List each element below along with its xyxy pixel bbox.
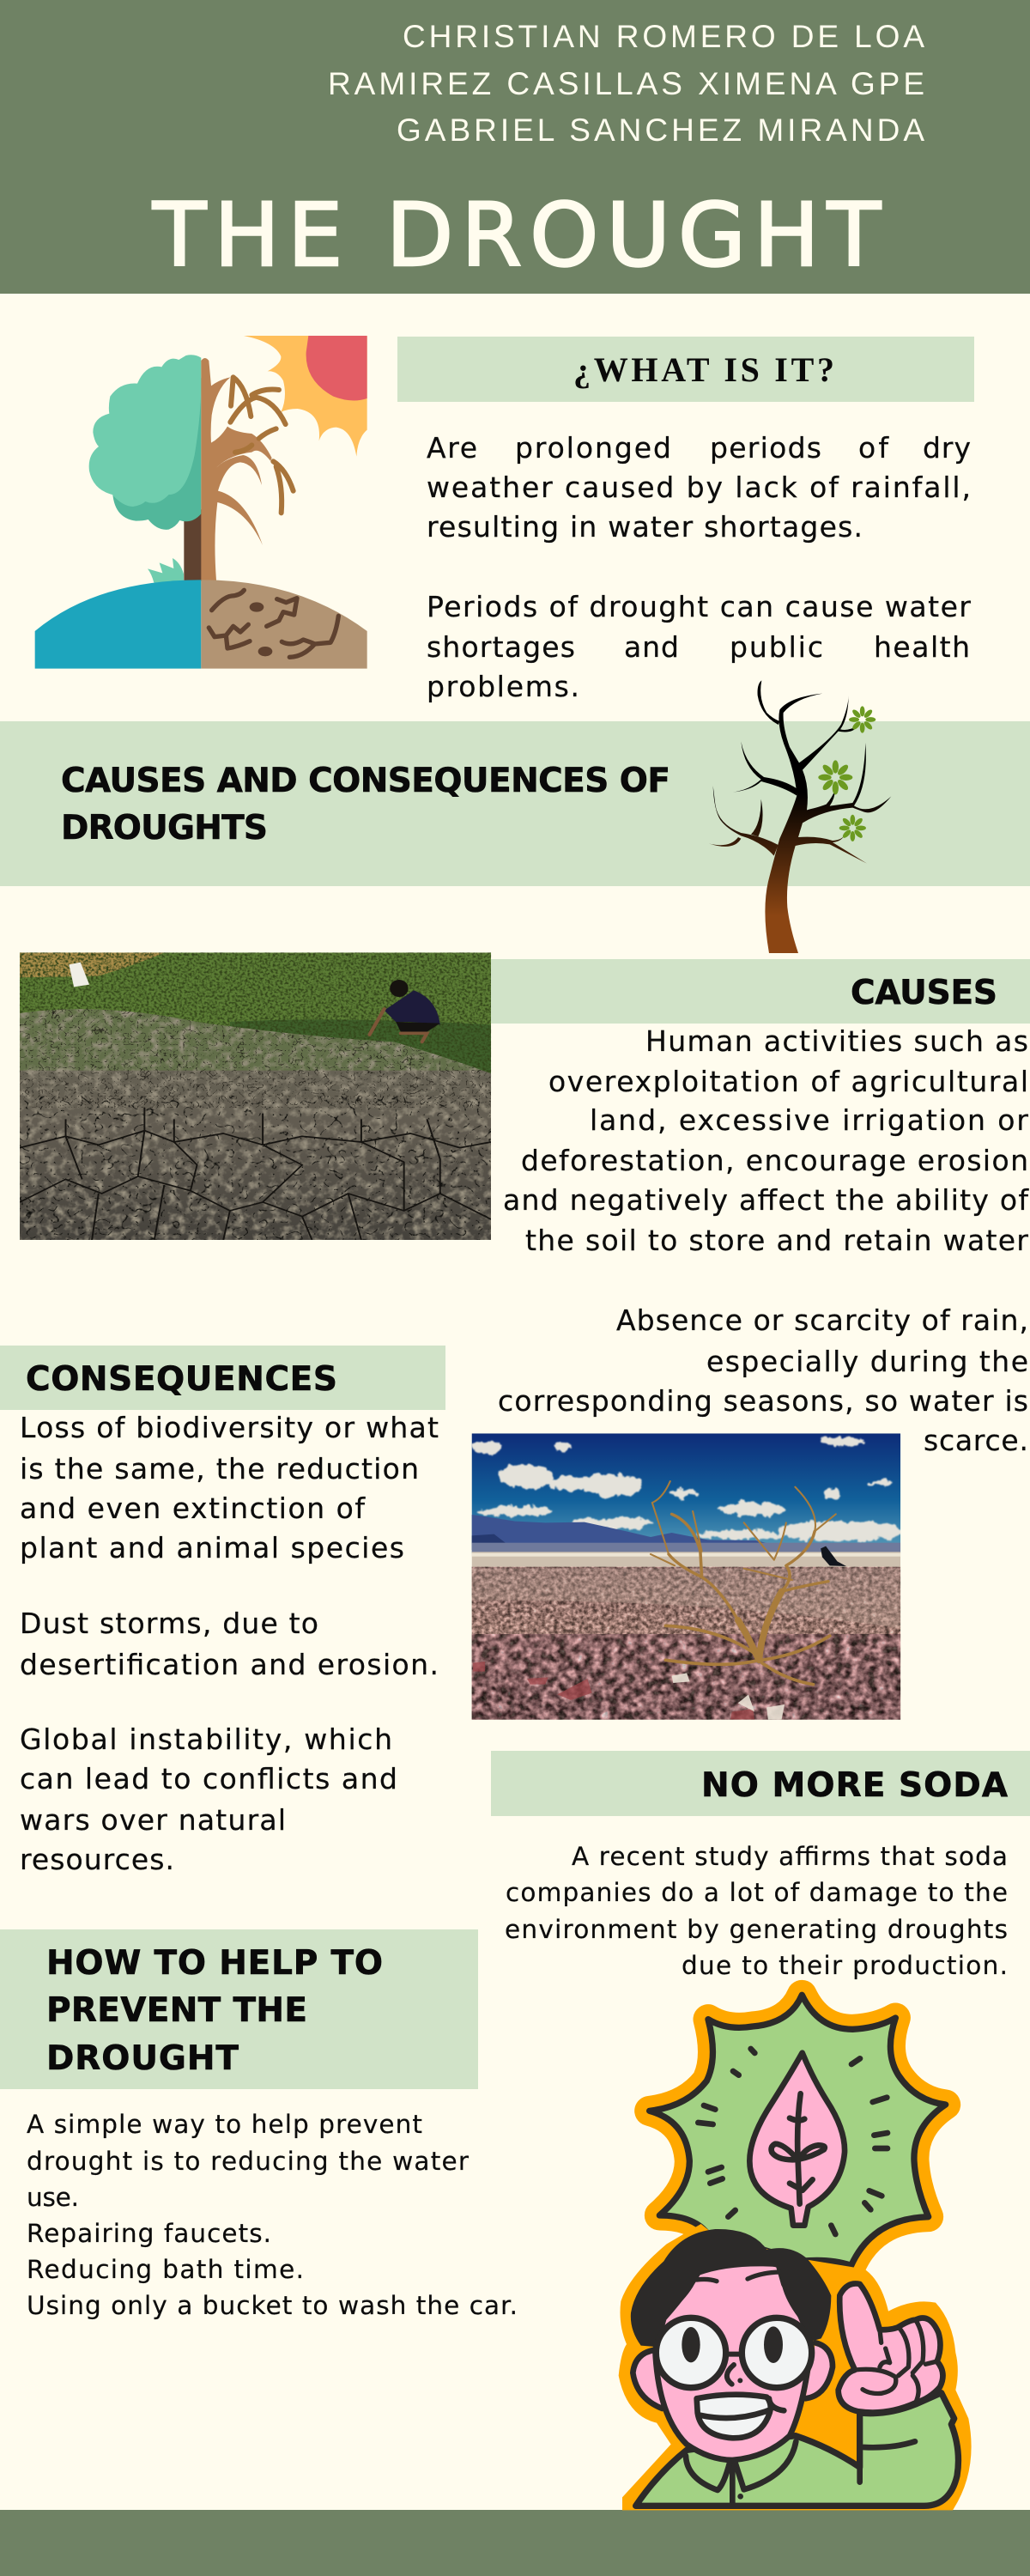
tips text: drought is to reducing the water — [27, 2147, 470, 2176]
definition text: and — [624, 630, 679, 664]
consequences text: wars over natural — [20, 1803, 286, 1837]
definition text: public — [730, 630, 823, 664]
tips text: Reducing bath time. — [27, 2255, 304, 2284]
soda text: due to their production. — [682, 1951, 1008, 1980]
definition text: prolonged — [515, 431, 671, 465]
authors: GABRIEL SANCHEZ MIRANDA — [397, 112, 924, 148]
causes text: Absence or scarcity of rain, — [616, 1303, 1028, 1337]
hair — [631, 2229, 831, 2347]
panel: causes — [491, 959, 1030, 1457]
heading band: no more soda — [491, 1751, 1030, 1816]
causes text: and negatively affect the ability of — [503, 1183, 1029, 1217]
authors: RAMIREZ CASILLAS XIMENA GPE — [328, 66, 924, 101]
tips text: Using only a bucket to wash the car. — [27, 2291, 518, 2320]
heading: causes: CAUSES — [851, 974, 997, 1012]
definition text: weather caused by lack of rainfall, — [427, 471, 971, 504]
heading: what is it: ¿WHAT IS IT? — [573, 350, 834, 389]
soda text: A recent study affirms that soda — [572, 1842, 1008, 1871]
panel: what is it — [397, 337, 974, 703]
definition text: Periods of drought can cause water — [427, 590, 971, 623]
definition text: health — [874, 630, 970, 664]
header band — [0, 0, 1030, 294]
heading band: how to help — [0, 1929, 478, 2089]
ears — [633, 2342, 833, 2409]
heading band: consequences — [0, 1346, 445, 1410]
soda text: environment by generating droughts — [505, 1915, 1008, 1944]
consequences text — [20, 1411, 439, 1876]
heading: how to help: DROUGHT — [46, 2039, 239, 2078]
photo detail: raven — [821, 1546, 846, 1566]
icon: smiling man pointing up — [619, 2224, 972, 2510]
banner heading: CAUSES AND CONSEQUENCES OF — [61, 762, 670, 800]
icon: half green half dry tree with sun — [35, 336, 367, 669]
causes text: scarce. — [924, 1424, 1028, 1457]
definition text: dry — [923, 431, 971, 465]
authors: CHRISTIAN ROMERO DE LOA — [403, 19, 924, 54]
heading: consequences: CONSEQUENCES — [26, 1360, 337, 1399]
heading band: what is it — [397, 337, 974, 402]
panel: consequences — [0, 1346, 445, 1876]
tips text: Repairing faucets. — [27, 2219, 271, 2248]
heading band: causes — [491, 959, 1030, 1024]
heading: how to help — [46, 1944, 383, 2078]
photo: dead tree in the desert — [472, 1433, 904, 1722]
consequences text: Loss of biodiversity or what — [20, 1411, 439, 1444]
panel: no more soda — [491, 1751, 1030, 1980]
definition text: resulting in water shortages. — [427, 510, 863, 544]
soda text: companies do a lot of damage to the — [506, 1878, 1008, 1907]
causes text: Human activities such as — [645, 1024, 1028, 1058]
glasses — [656, 2318, 726, 2388]
tips text: A simple way to help prevent — [27, 2110, 422, 2139]
definition text: Are — [427, 431, 477, 465]
causes text: corresponding seasons, so water is — [498, 1384, 1028, 1418]
causes text: land, excessive irrigation or — [590, 1103, 1028, 1137]
heading: how to help: PREVENT THE — [46, 1991, 307, 2030]
photo: cracked earth with person — [20, 952, 491, 1240]
consequences text: and even extinction of — [20, 1492, 366, 1525]
heading: how to help: HOW TO HELP TO — [46, 1944, 383, 1983]
definition text: problems. — [427, 670, 579, 703]
shirt — [636, 2393, 958, 2506]
authors — [328, 19, 924, 148]
causes text: the soil to store and retain water — [525, 1224, 1028, 1257]
definition text — [427, 431, 971, 703]
consequences text: Dust storms, due to — [20, 1607, 318, 1640]
consequences text: is the same, the reduction — [20, 1452, 419, 1485]
photo detail: dead bush — [651, 1481, 836, 1685]
panel: causes and consequences banner — [0, 721, 1030, 886]
banner heading: DROUGHTS — [61, 809, 268, 848]
consequences text: can lead to conflicts and — [20, 1762, 397, 1795]
heading: no more soda: NO MORE SODA — [701, 1766, 1008, 1805]
panel: how to help — [0, 1929, 518, 2320]
footer band — [0, 2510, 1030, 2576]
causes text: overexploitation of agricultural — [548, 1065, 1028, 1098]
illustration: leaf badge and pointing man — [619, 1995, 972, 2510]
consequences text: resources. — [20, 1843, 174, 1876]
tips text: use. — [27, 2183, 79, 2212]
soda text — [505, 1842, 1008, 1980]
photo detail: sack — [69, 963, 89, 987]
causes text: deforestation, encourage erosion — [521, 1144, 1028, 1177]
definition text: shortages — [427, 630, 575, 664]
pointing hand — [839, 2283, 942, 2413]
face — [655, 2263, 811, 2460]
consequences text: desertification and erosion. — [20, 1648, 439, 1681]
mouth — [697, 2395, 771, 2438]
definition text: of — [858, 431, 889, 465]
icon: leaf badge — [650, 1995, 946, 2265]
consequences text: plant and animal species — [20, 1531, 404, 1564]
banner heading — [61, 762, 670, 848]
title: THE DROUGHT — [152, 185, 882, 287]
icon: tree with green rosettes — [709, 680, 891, 953]
definition text: periods — [710, 431, 821, 465]
causes text: especially during the — [706, 1345, 1028, 1378]
photo detail: crouching person — [369, 980, 440, 1042]
tips text — [27, 2110, 518, 2320]
causes text — [498, 1024, 1029, 1457]
consequences text: Global instability, which — [20, 1722, 392, 1756]
